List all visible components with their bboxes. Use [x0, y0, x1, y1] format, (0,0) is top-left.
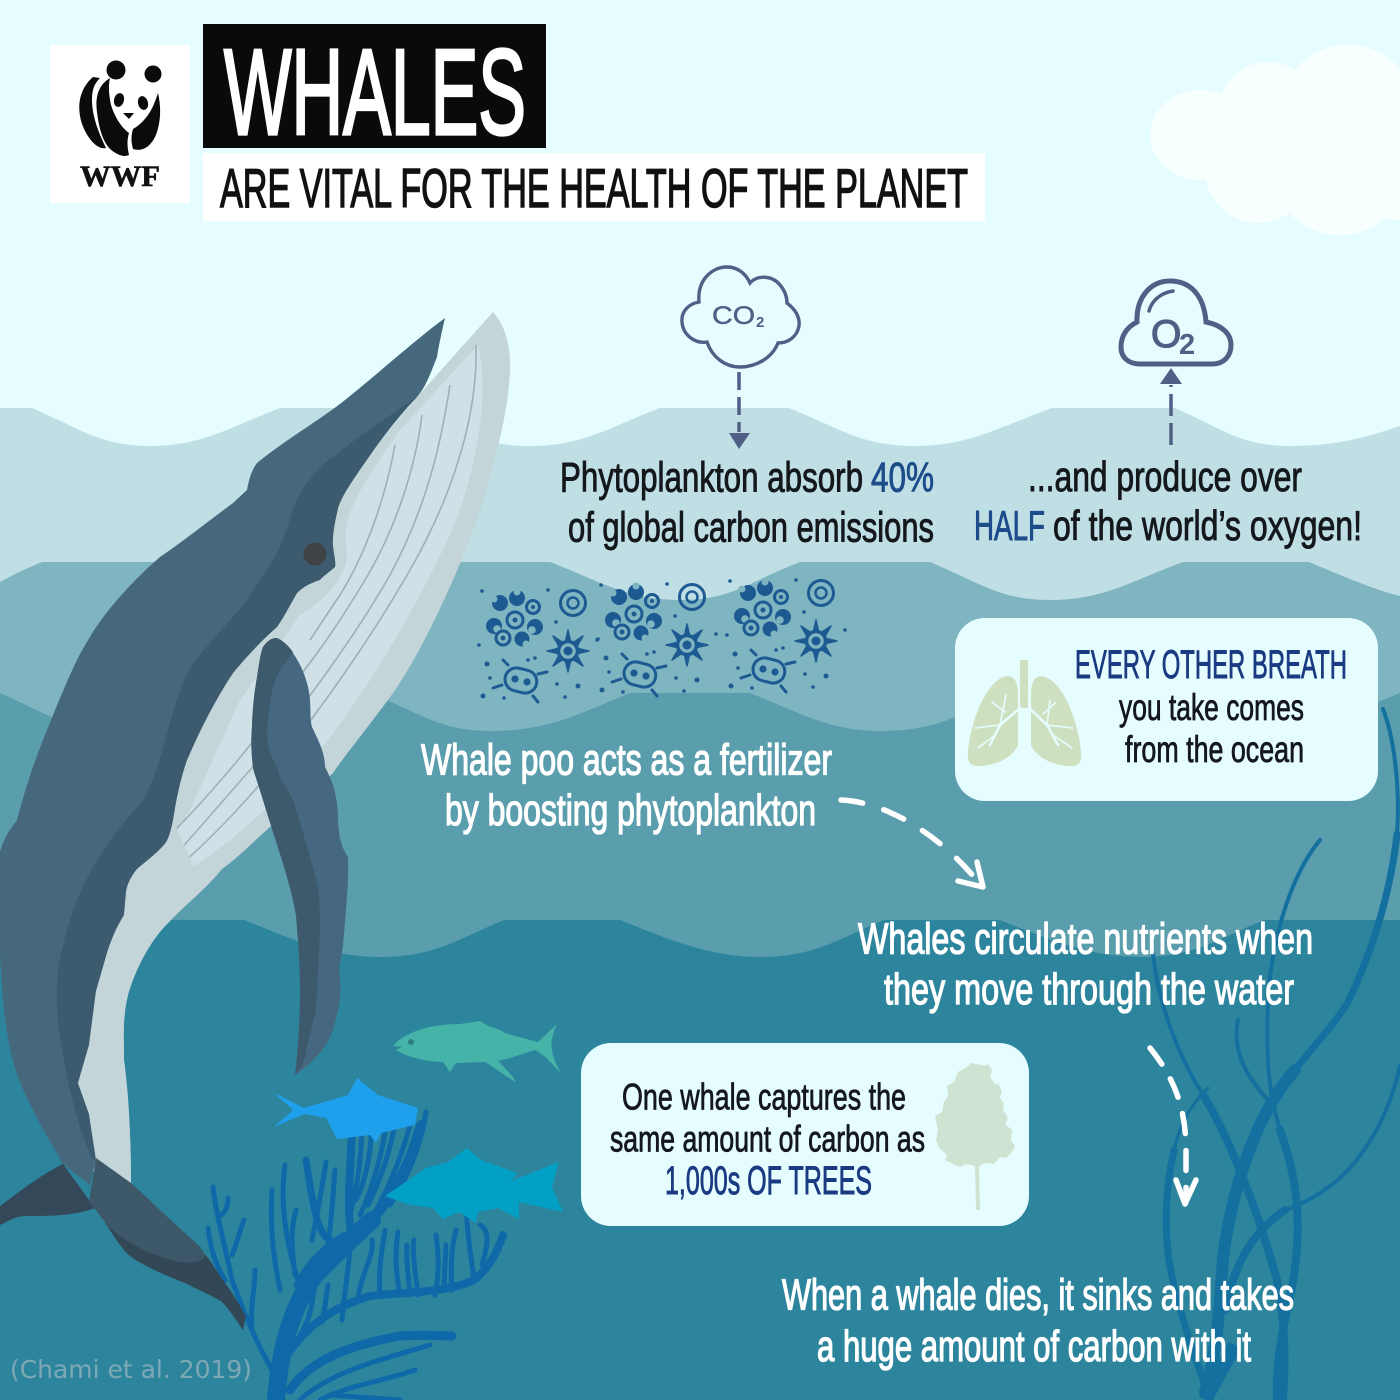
whale throat inner: [157, 345, 483, 887]
whale belly strip: [78, 820, 200, 1190]
phytoplankton cluster 1: [477, 588, 599, 702]
green fish: [393, 1021, 561, 1082]
text: produce oxygen: [974, 453, 1362, 549]
whale eye: [304, 542, 326, 566]
whale dark band: [57, 397, 417, 1160]
title: [203, 24, 546, 160]
kelp: [1153, 709, 1400, 1400]
text: phytoplankton absorb: [560, 454, 934, 550]
whale flipper shade: [251, 638, 320, 1075]
title: WHALES: [224, 24, 526, 160]
teal fish: [385, 1148, 563, 1223]
text: produce oxygen: HALF: [974, 502, 1045, 549]
whale flipper: [251, 638, 348, 1075]
whale: [0, 312, 510, 1330]
icon: lungs: [968, 660, 1081, 766]
panel: trees: [581, 1043, 1029, 1226]
icon: O2 cloud: 2: [1179, 329, 1195, 361]
icon: CO2 cloud: [682, 267, 799, 367]
text: whale poo: Whale poo acts as a fertilizer: [421, 736, 832, 784]
text: from the ocean: from the ocean: [1125, 729, 1304, 770]
wordmark: WWF: [80, 160, 160, 193]
icon: CO2 cloud: 2: [756, 314, 764, 331]
arrow: CO2 down: [729, 372, 750, 449]
text: 1000s of trees: 1,000s OF TREES: [665, 1159, 872, 1203]
text: phytoplankton absorb: of global carbon emissions: [568, 504, 934, 550]
text: circulate nutrients: [858, 914, 1313, 1014]
text: one whale: One whale captures the: [622, 1076, 906, 1118]
whale grooves: [157, 345, 476, 882]
right fluke edge: [104, 1221, 246, 1330]
icon: tree: [935, 1063, 1015, 1210]
phytoplankton cluster 2: [596, 582, 718, 696]
arrow: O2 up: [1160, 368, 1182, 445]
subtitle: ARE VITAL FOR THE HEALTH OF THE PLANET: [220, 157, 968, 219]
icon: O2 cloud: O: [1151, 313, 1181, 356]
text: whale poo: [421, 736, 832, 835]
text: phytoplankton absorb: Phytoplankton absorb: [560, 454, 863, 500]
icon: panda: [79, 60, 162, 156]
arrow: to sinks: [1150, 1048, 1196, 1204]
text: you take comes: you take comes: [1119, 687, 1304, 728]
blue fish: [274, 1078, 418, 1143]
text: same amount: same amount of carbon as: [610, 1118, 925, 1160]
right fluke: [89, 1158, 246, 1330]
phytoplankton cluster 3: [725, 578, 847, 692]
logo panel: [50, 45, 190, 203]
icon: CO2 cloud: CO: [712, 302, 755, 330]
coral: [208, 1110, 503, 1400]
text: phytoplankton absorb: 40%: [871, 454, 934, 500]
panel: every other breath: [955, 618, 1378, 801]
arrow: to nutrients: [841, 800, 983, 887]
subtitle: [203, 153, 985, 221]
whale body: [0, 318, 445, 1185]
cloud: [1150, 45, 1400, 235]
icon: O2 cloud: [1121, 281, 1231, 364]
source citation: (Chami et al. 2019): [10, 1355, 252, 1384]
text: whale poo: by boosting phytoplankton: [445, 786, 816, 835]
text: whale dies: [782, 1270, 1294, 1371]
left fluke: [0, 1164, 95, 1225]
text: produce oxygen: ...and produce over: [1028, 453, 1302, 500]
ocean wave bands: [0, 408, 1400, 1400]
whale throat pleats: [78, 312, 510, 1190]
